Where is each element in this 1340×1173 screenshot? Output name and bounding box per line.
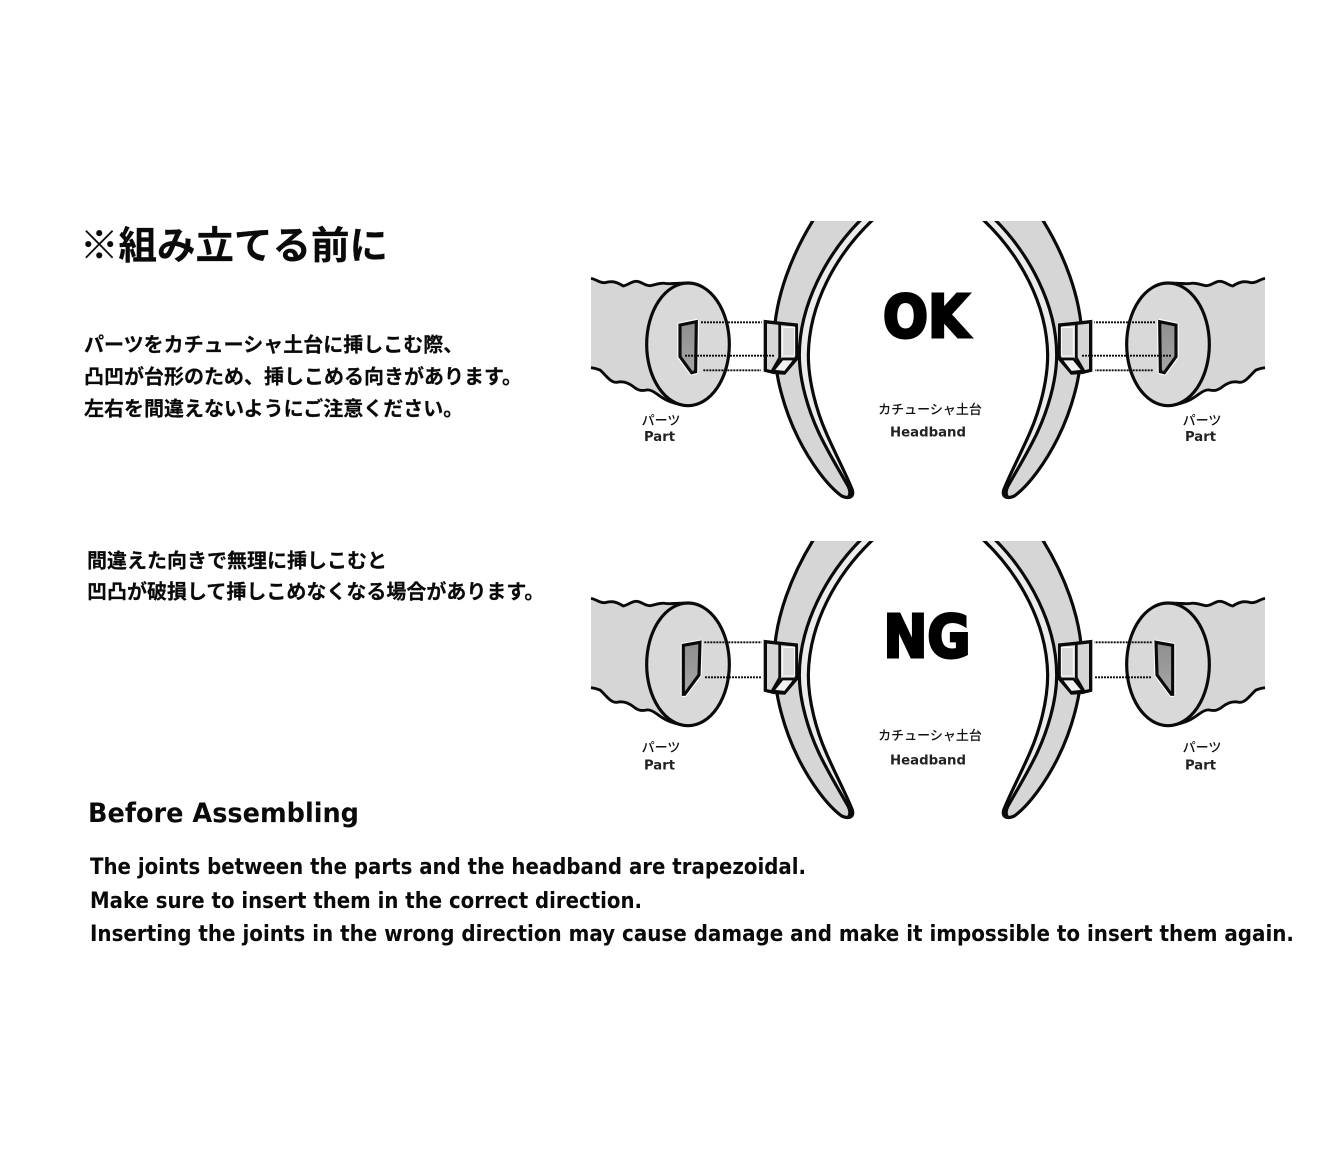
diagram: OK (591, 218, 1265, 497)
heading: Before Assembling: Before Assembling (88, 798, 359, 829)
left part and headband (591, 538, 874, 817)
headband label: Headband (890, 754, 966, 768)
text block: Japanese intro: 凸凹が台形のため、挿しこめる向きがあります。 (84, 364, 522, 388)
left part label: Part (644, 758, 675, 774)
left part label: パーツ (642, 413, 680, 428)
diagram: NG (591, 538, 1265, 817)
text block: Japanese warning: 間違えた向きで無理に挿しこむと (87, 550, 387, 572)
right part label (1183, 413, 1221, 445)
headband label (878, 402, 982, 440)
left part label (642, 740, 680, 774)
headband label: カチューシャ土台 (878, 402, 982, 417)
NG label: NG (884, 602, 970, 671)
right part label: Part (1185, 430, 1216, 445)
headband label: カチューシャ土台 (878, 728, 982, 743)
title: ※組み立てる前に (80, 225, 388, 268)
right part and headband (982, 538, 1265, 817)
right part label: パーツ (1183, 740, 1221, 755)
left part label (642, 413, 680, 445)
text block: English instructions: The joints between the parts and the headband are trapezoidal. (90, 855, 806, 880)
left part label: パーツ (642, 740, 680, 755)
left part and headband (591, 218, 874, 497)
right part label (1183, 740, 1221, 774)
right part and headband (982, 218, 1265, 497)
text block: English instructions (90, 855, 1294, 947)
headband label (878, 728, 982, 768)
text block: Japanese warning: 凹凸が破損して挿しこめなくなる場合があります。 (87, 580, 544, 604)
text block: Japanese intro (84, 334, 522, 420)
right part label: Part (1185, 758, 1216, 774)
text block: Japanese warning (87, 550, 544, 604)
right part label: パーツ (1183, 413, 1221, 428)
text block: Japanese intro: パーツをカチューシャ土台に挿しこむ際、 (84, 334, 463, 356)
headband label: Headband (890, 426, 966, 440)
OK label: OK (883, 282, 971, 351)
left part label: Part (644, 430, 675, 445)
text block: Japanese intro: 左右を間違えないようにご注意ください。 (84, 396, 463, 420)
text block: English instructions: Make sure to insert them in the correct direction. (90, 889, 642, 914)
